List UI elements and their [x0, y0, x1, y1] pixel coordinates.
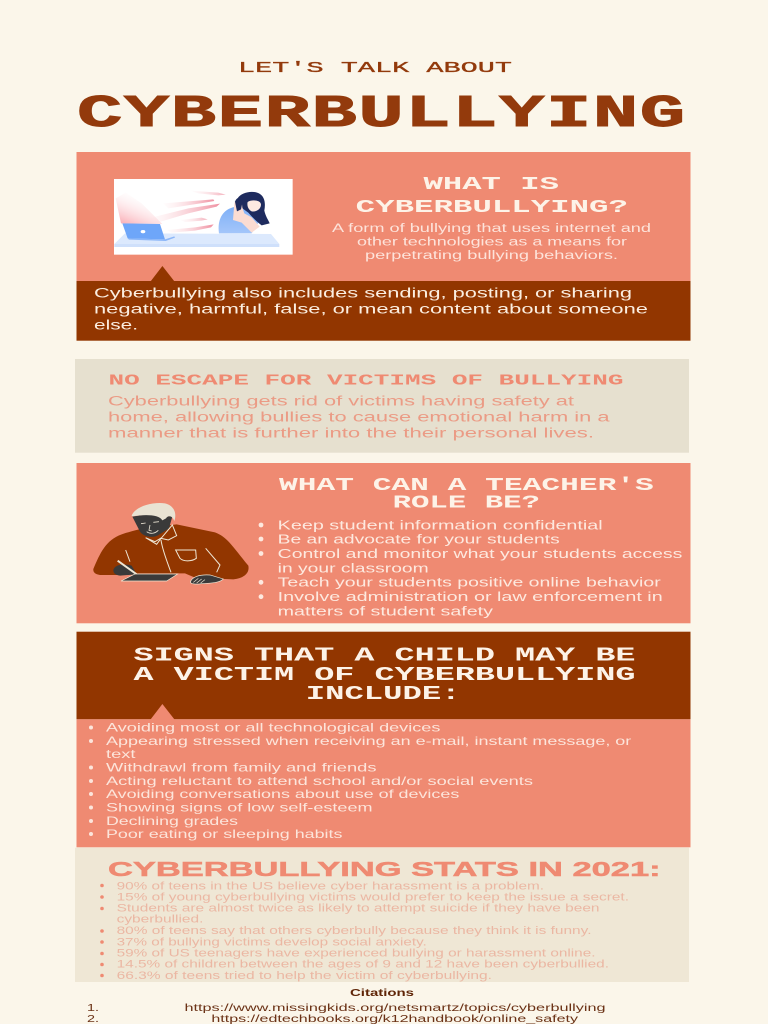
bullet list: signs: Acting reluctant to attend school and/or social events [106, 774, 533, 788]
bullet list: stats: cyberbullied. [117, 914, 203, 926]
bullet list: teacher's actions: Be an advocate for your students [278, 533, 560, 547]
heading: no escape: NO ESCAPE FOR VICTIMS OF BULLYING [108, 372, 624, 389]
heading: what is cyberbullying [356, 175, 628, 218]
heading: teacher's role [279, 476, 654, 514]
illustration: girl being targeted from a laptop [114, 179, 293, 255]
bullet list: stats [100, 880, 629, 982]
bullet list: signs [89, 720, 631, 841]
bullet list: stats: Students are almost twice as likely to attempt suicide if they have been [117, 903, 599, 915]
definition text [332, 223, 651, 262]
body text: no escape: home, allowing bullies to cause emotional harm in a [108, 410, 610, 425]
citations [87, 988, 606, 1024]
illustration: teacher writing on a tablet [93, 503, 249, 584]
bullet list: teacher's actions: Involve administration or law enforcement in [278, 590, 663, 604]
bullet list: teacher's actions: matters of student safety [278, 604, 494, 618]
dark strip with extended definition: Cyberbullying also includes sending, posting, or sharing [94, 286, 632, 300]
bullet list: teacher's actions: Teach your students positive online behavior [278, 576, 661, 590]
panel: signs of a victim [76, 632, 690, 847]
bullet list: stats: 80% of teens say that others cyberbully because they think it is funny. [117, 925, 591, 937]
bullet list: stats: 66.3% of teens tried to help the victim of cyberbullying. [117, 970, 492, 982]
heading: signs: A VICTIM OF CYBERBULLYING [134, 664, 636, 686]
bullet list: signs: Declining grades [106, 814, 238, 828]
bullet list: signs: Avoiding most or all technological devices [106, 720, 441, 734]
bullet list: stats: 15% of young cyberbullying victims would prefer to keep the issue a secret. [117, 892, 629, 904]
heading: what is cyberbullying: CYBERBULLYING? [356, 198, 628, 218]
heading: signs [134, 645, 636, 705]
bullet list: signs: Poor eating or sleeping habits [106, 827, 343, 841]
kicker: let's talk about: LET'S TALK ABOUT [238, 60, 512, 77]
panel: what is cyberbullying [76, 152, 690, 341]
bullet list: teacher's actions [259, 519, 682, 618]
bullet list: teacher's actions: Keep student information confidential [278, 519, 603, 533]
heading: what is cyberbullying: WHAT IS [424, 175, 559, 195]
citation 1: https://www.missingkids.org/netsmartz/topics/cyberbullying [184, 1003, 606, 1014]
definition text: A form of bullying that uses internet and [332, 223, 651, 235]
heading: signs: SIGNS THAT A CHILD MAY BE [134, 645, 636, 667]
bullet list: signs: Showing signs of low self-esteem [106, 800, 373, 814]
title block [77, 60, 685, 140]
definition text: other technologies as a means for [357, 237, 627, 249]
citation 1 [87, 1003, 606, 1014]
heading: signs: INCLUDE: [306, 683, 460, 705]
citations heading: Citations [350, 988, 415, 999]
bullet list: stats: 14.5% of children between the ages of 9 and 12 have been cyberbullied. [117, 959, 609, 971]
bullet list: teacher's actions: Control and monitor what your students access [278, 547, 682, 561]
panel: no escape for victims [75, 359, 689, 453]
callout pointer [150, 704, 174, 720]
body text: no escape: manner that is further into the their personal lives. [108, 426, 594, 440]
bullet list: signs: text [106, 747, 137, 761]
bullet list: signs: Withdrawl from family and friends [106, 760, 377, 774]
heading: teacher's role: ROLE BE? [393, 494, 540, 514]
bullet list: stats: 37% of bullying victims develop social anxiety. [117, 936, 427, 948]
body text: no escape [108, 394, 610, 440]
panel: stats in 2021 [75, 848, 689, 982]
bullet list: signs: Appearing stressed when receiving an e-mail, instant message, or [106, 734, 631, 748]
body text: no escape: Cyberbullying gets rid of victims having safety at [108, 394, 574, 409]
panel: teacher's role [76, 463, 690, 623]
bullet list: teacher's actions: in your classroom [278, 561, 429, 575]
heading: teacher's role: WHAT CAN A TEACHER'S [279, 476, 654, 496]
dark strip with extended definition [76, 266, 690, 341]
bullet list: signs: Avoiding conversations about use of devices [106, 787, 459, 801]
citation 2 [87, 1014, 578, 1024]
bullet list: stats: 90% of teens in the US believe cyber harassment is a problem. [117, 880, 544, 892]
bullet list: stats: 59% of US teenagers have experienced bullying or harassment online. [117, 948, 595, 960]
main title: CYBERBULLYING [77, 88, 685, 140]
citation 1: 1. [87, 1003, 99, 1014]
dark strip with extended definition: else. [94, 318, 138, 332]
dark strip with extended definition: negative, harmful, false, or mean content about someone [94, 302, 648, 316]
signs list background [76, 719, 690, 847]
heading: stats: CYBERBULLYING STATS IN 2021: [108, 859, 661, 881]
definition text: perpetrating bullying behaviors. [365, 250, 618, 262]
